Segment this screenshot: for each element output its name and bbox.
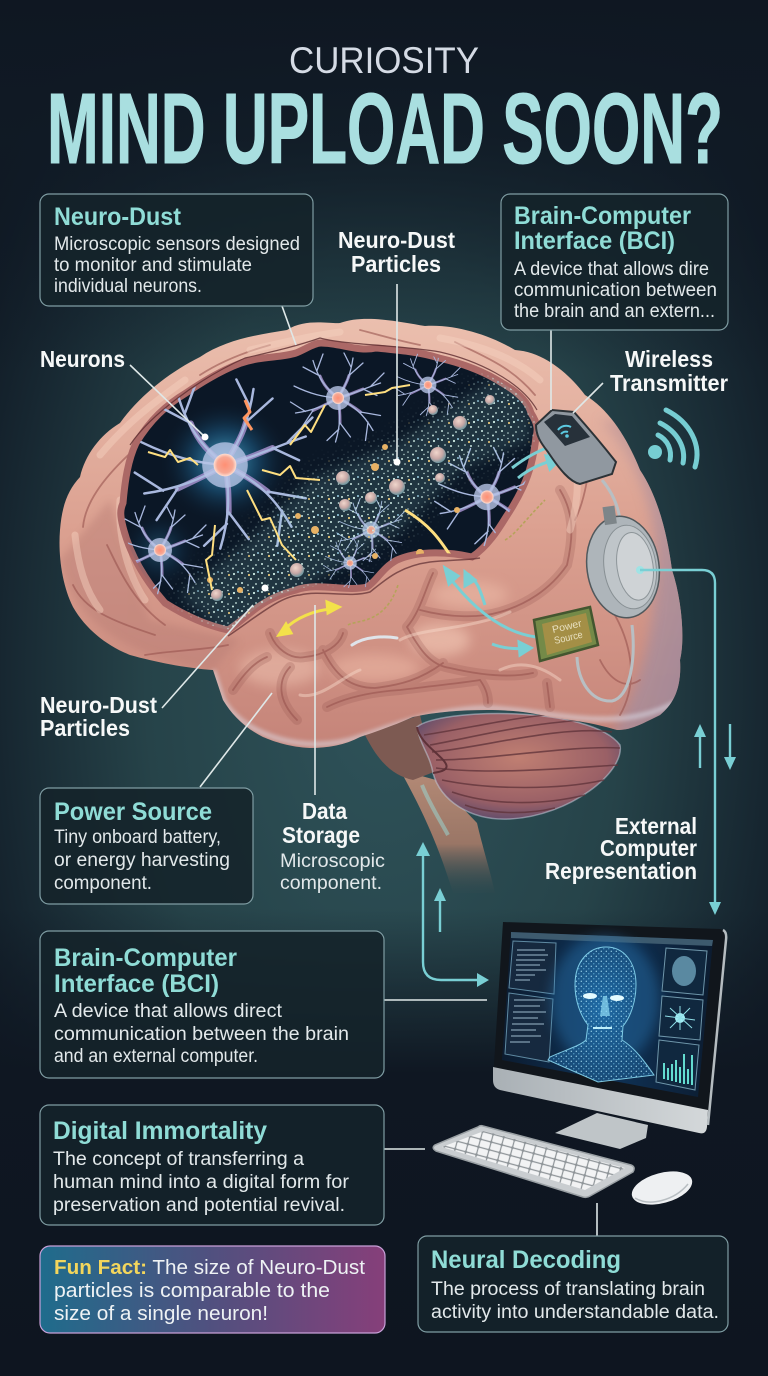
panel: brain-computer interface lower: Interface (BCI) <box>54 970 219 998</box>
panel: neuro-dust <box>40 194 313 306</box>
label: data storage <box>280 798 385 894</box>
label: wireless transmitter: Wireless <box>625 346 713 372</box>
panel: brain-computer interface top: A device that allows dire <box>514 259 709 280</box>
panel: neural decoding: activity into understandable data. <box>431 1302 719 1323</box>
surface shading and folds <box>60 330 700 760</box>
panel: neuro-dust: individual neurons. <box>54 276 202 297</box>
connector lines <box>130 284 603 1236</box>
cutaway window <box>117 337 539 636</box>
panel: brain-computer interface top: Interface (BCI) <box>514 227 675 255</box>
callout: fun fact: size of a single neuron! <box>54 1303 268 1325</box>
panel: power source: or energy harvesting <box>54 850 230 871</box>
window bar <box>511 932 713 946</box>
power source chip: Power <box>551 618 584 636</box>
label: neuro-dust particles top <box>338 227 455 277</box>
label: data storage: Data <box>302 798 347 824</box>
small electrode traces <box>348 500 545 625</box>
label: wireless transmitter <box>610 346 728 396</box>
lightning sparks <box>148 385 450 590</box>
panel: brain-computer interface lower: communication between the brain <box>54 1024 349 1045</box>
callout: fun fact: Fun Fact: The size of Neuro-Dust <box>54 1257 365 1279</box>
wifi icon <box>648 410 697 467</box>
label: neuro-dust particles top: Particles <box>351 251 441 277</box>
right side panels <box>656 948 707 1090</box>
label: neuro-dust particles left: Particles <box>40 715 130 741</box>
panel: neuro-dust: Microscopic sensors designed <box>54 234 300 255</box>
panel: neuro-dust: to monitor and stimulate <box>54 255 252 276</box>
teal signal arrows to transmitter and power source <box>445 442 560 655</box>
monitor body <box>493 922 725 1133</box>
screen <box>502 932 713 1097</box>
label: neuro-dust particles top: Neuro-Dust <box>338 227 455 253</box>
title <box>47 40 723 185</box>
label: wireless transmitter: Transmitter <box>610 370 728 396</box>
neuron glow <box>172 412 278 512</box>
holographic head <box>548 935 660 1082</box>
panel: brain-computer interface top: communication between <box>514 280 717 301</box>
silver scar highlight <box>352 637 397 645</box>
panel: digital immortality: The concept of transferring a <box>53 1149 304 1170</box>
cerebrum outer shape <box>60 319 682 748</box>
earpiece module <box>579 501 666 623</box>
label: data storage: component. <box>280 873 382 894</box>
yellow bidirectional arrow <box>279 602 339 635</box>
callout: fun fact <box>40 1246 385 1333</box>
panel: neural decoding <box>418 1236 728 1332</box>
panel: power source <box>40 788 253 904</box>
panel: power source: Tiny onboard battery, <box>54 827 221 848</box>
label: external computer representation: Computer <box>600 835 697 861</box>
panel: digital immortality <box>40 1105 384 1225</box>
label: data storage: Microscopic <box>280 851 385 872</box>
panel: digital immortality: Digital Immortality <box>53 1117 267 1145</box>
label: external computer representation: External <box>615 813 697 839</box>
panel: digital immortality: preservation and potential revival. <box>53 1195 345 1216</box>
panel: neural decoding: Neural Decoding <box>431 1246 621 1274</box>
panel: neural decoding: The process of translating brain <box>431 1279 705 1300</box>
left log panels <box>505 941 556 1062</box>
callout: fun fact: particles is comparable to the <box>54 1280 330 1302</box>
cerebellum <box>417 714 620 819</box>
panel: brain-computer interface lower <box>40 931 384 1078</box>
neuro-dust particles <box>168 373 536 630</box>
label: neuro-dust particles left: Neuro-Dust <box>40 692 157 718</box>
brain stem <box>365 715 495 893</box>
power source chip <box>534 607 598 661</box>
label: neuro-dust particles left <box>40 692 157 741</box>
label: data storage: Storage <box>282 822 360 848</box>
panel: brain-computer interface lower: and an external computer. <box>54 1046 258 1067</box>
label: external computer representation <box>545 813 697 884</box>
power source chip: Source <box>553 630 584 647</box>
mouse <box>628 1165 696 1211</box>
brain illustration <box>60 319 700 893</box>
panel: brain-computer interface top: the brain and an extern... <box>514 301 715 322</box>
panel: digital immortality: human mind into a digital form for <box>53 1172 350 1193</box>
keyboard <box>433 1126 634 1197</box>
panel: brain-computer interface lower: Brain-Computer <box>54 944 237 972</box>
eyebrow: CURIOSITY <box>289 40 479 81</box>
panel: neuro-dust: Neuro-Dust <box>54 203 182 231</box>
panel: power source: component. <box>54 873 152 894</box>
panel: brain-computer interface top: Brain-Computer <box>514 202 691 230</box>
panel: brain-computer interface lower: A device that allows direct <box>54 1001 283 1022</box>
label: external computer representation: Representation <box>545 858 697 884</box>
panel: brain-computer interface top <box>501 194 728 330</box>
wireless transmitter device <box>536 410 616 484</box>
computer monitor <box>493 922 726 1149</box>
neurons <box>135 380 312 549</box>
label: neurons: Neurons <box>40 346 125 372</box>
stand <box>555 1113 648 1149</box>
teal data flow arrows <box>416 566 736 987</box>
cables <box>577 480 633 701</box>
panel: power source: Power Source <box>54 798 212 826</box>
